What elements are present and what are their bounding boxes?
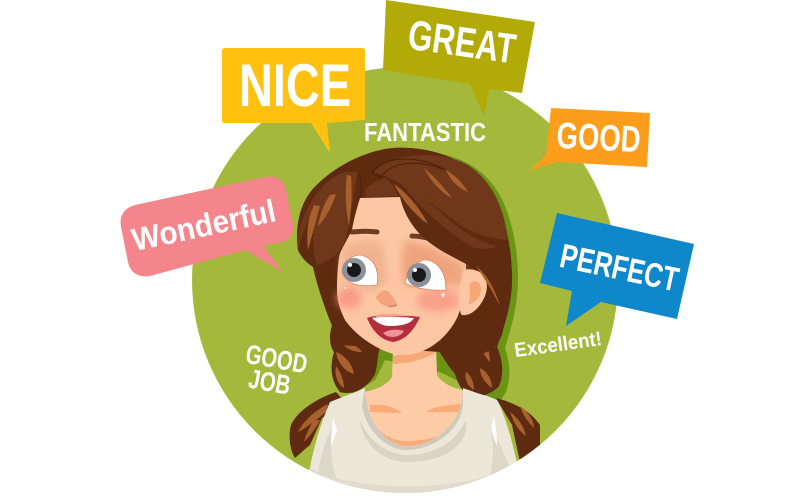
girl character (290, 148, 540, 500)
text: GOOD JOB: JOB (246, 364, 293, 401)
text: Excellent!: Excellent! (513, 328, 603, 362)
left eye (342, 255, 378, 286)
chest shading (370, 347, 462, 446)
face shading around eyes (342, 241, 387, 292)
right sweep (374, 155, 508, 240)
speech bubble: GREAT: GREAT (405, 11, 519, 72)
hair highlights (307, 168, 500, 306)
right eye (405, 260, 446, 290)
face (337, 197, 466, 355)
speech bubble: PERFECT (540, 213, 694, 326)
hair front (297, 148, 512, 312)
left lock (298, 172, 358, 265)
speech bubble: Wonderful (121, 177, 293, 276)
speech bubble: GREAT (383, 0, 535, 116)
speech bubble: PERFECT: PERFECT (557, 237, 682, 299)
speech bubble: NICE (222, 48, 365, 153)
text: GOOD JOB: GOOD (243, 339, 310, 379)
speech bubble: NICE: NICE (239, 52, 351, 119)
hair back (297, 148, 512, 360)
speech bubble: GOOD: GOOD (556, 115, 642, 160)
green background circle (192, 67, 618, 493)
left braid tail (290, 392, 345, 458)
nose (376, 290, 397, 306)
right braid (440, 329, 504, 396)
mouth (367, 314, 420, 342)
left braid (330, 326, 380, 393)
text: GOOD JOB (243, 339, 310, 401)
eyebrows (352, 231, 431, 239)
hair and braid shadow (352, 153, 518, 401)
speech bubble: Wonderful: Wonderful (129, 192, 279, 258)
right braid tail (496, 398, 540, 462)
shirt (308, 388, 517, 493)
neck (364, 345, 464, 447)
ear (460, 269, 487, 315)
cheek blush (336, 287, 460, 312)
speech bubble: GOOD (529, 108, 650, 171)
text: FANTASTIC: FANTASTIC (364, 117, 486, 147)
